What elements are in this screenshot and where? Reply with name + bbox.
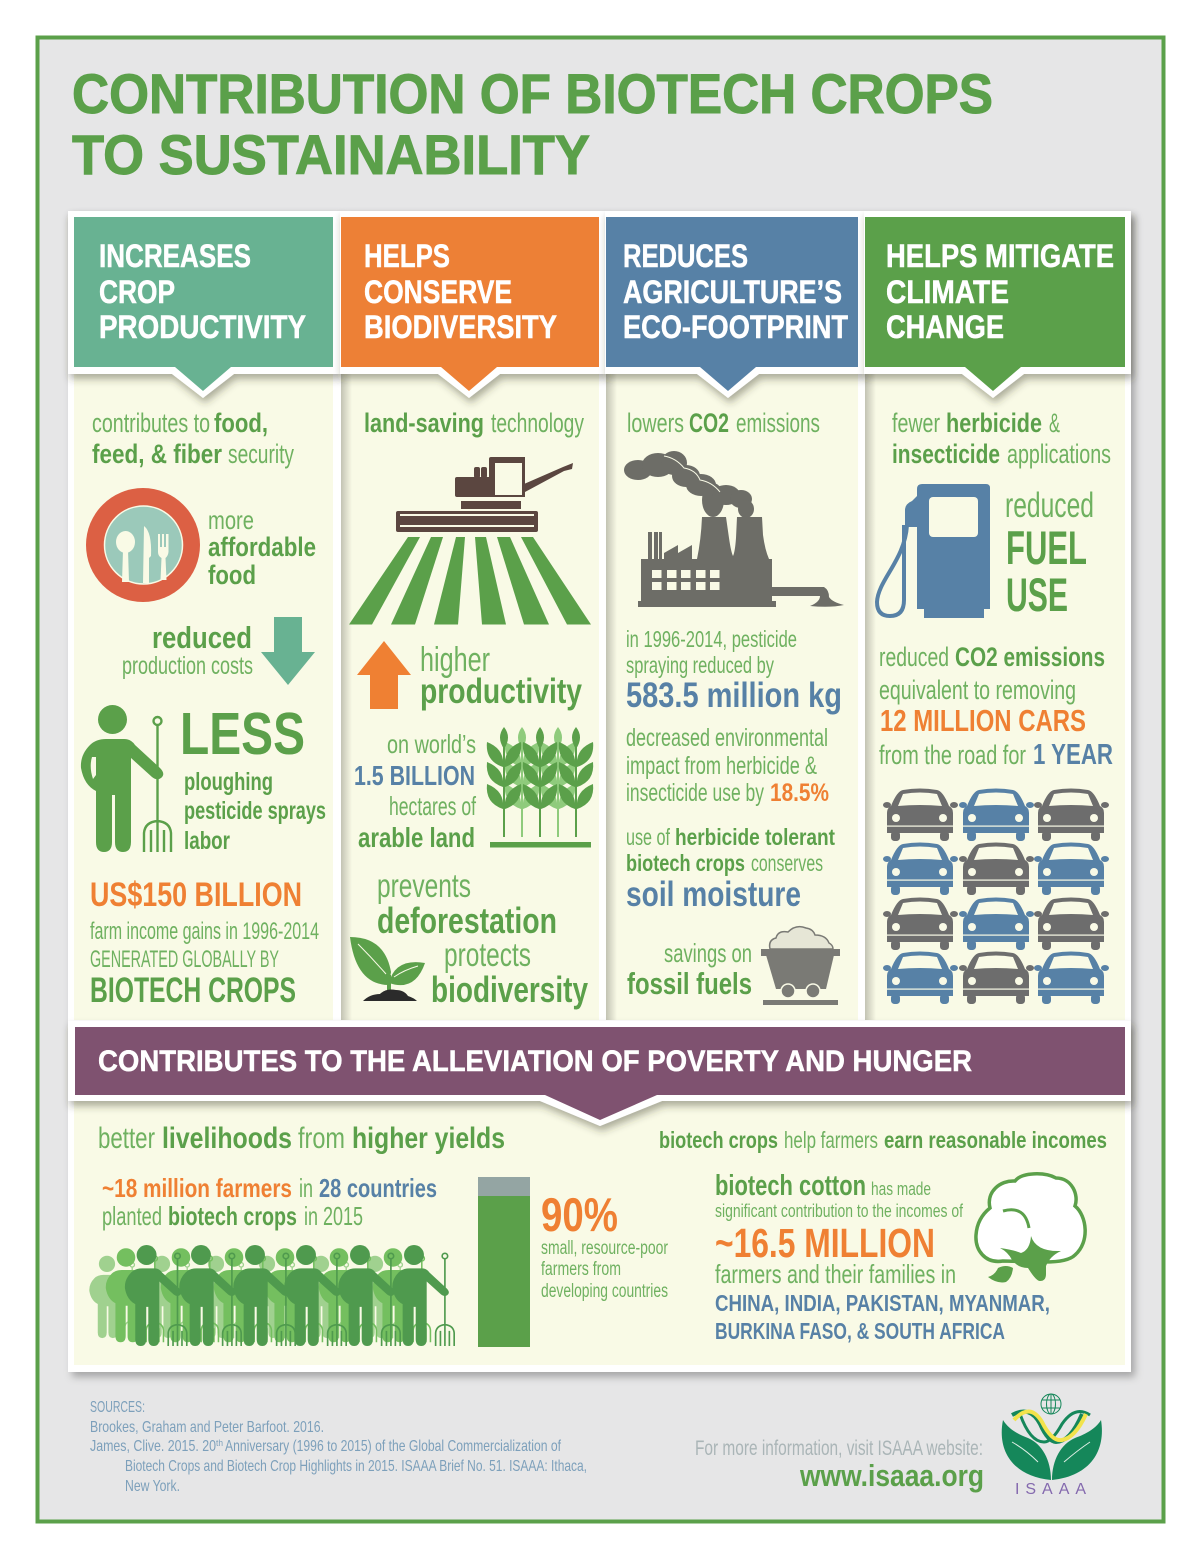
- text: food security: security: [228, 439, 294, 469]
- text: less ploughing: LESS: [180, 701, 305, 767]
- text: 18 million farmers: 28 countries: [319, 1173, 437, 1203]
- text: co2 cars: reduced: [879, 642, 949, 672]
- column 4 content: [877, 408, 1113, 1004]
- text: reduced fuel use: FUEL: [1006, 521, 1087, 574]
- panel: helps mitigate climate change header: HELPS MITIGATE: [886, 238, 1114, 274]
- text: co2 cars: 1 YEAR: [1033, 739, 1113, 771]
- text: food security: contributes to: [92, 408, 210, 438]
- text: co2 cars: [879, 642, 1113, 771]
- text: biotech cotton: [715, 1170, 1050, 1344]
- text: lowers co2 emissions: lowers: [627, 408, 684, 438]
- text: soil moisture: conserves: [751, 850, 823, 876]
- text: less ploughing: pesticide sprays: [184, 797, 326, 825]
- text: biotech cotton: ~16.5 MILLION: [715, 1220, 935, 1266]
- text: more affordable food: affordable: [208, 532, 316, 562]
- text: better livelihoods: from: [298, 1122, 345, 1155]
- icon: cotton boll: [976, 1174, 1085, 1282]
- icon: factory with smoke: [624, 451, 844, 607]
- text: 18 million farmers: in 2015: [304, 1201, 363, 1231]
- text: arable land: hectares of: [389, 791, 477, 821]
- text: lowers co2 emissions: emissions: [736, 408, 820, 438]
- text: pesticide spraying: in 1996-2014, pesticide: [626, 626, 797, 652]
- text: prevents deforestation: prevents: [377, 867, 471, 904]
- panel: helps mitigate climate change header: CLIMATE: [886, 274, 1009, 310]
- text: less ploughing: ploughing: [184, 768, 273, 796]
- text: soil moisture: use of: [626, 824, 670, 850]
- text: higher productivity: productivity: [420, 672, 582, 711]
- text: fewer herbicide: &: [1049, 408, 1060, 438]
- text: fossil fuels: savings on: [664, 938, 752, 968]
- text: prevents deforestation: deforestation: [377, 900, 557, 941]
- text: co2 cars: 12 MILLION CARS: [880, 703, 1086, 738]
- text: sources: Anniversary (1996 to 2015) of the Global Commercialization of: [225, 1438, 561, 1455]
- text: 18 million farmers: biotech crops: [168, 1201, 297, 1231]
- text: sources: Brookes, Graham and Peter Barfoot. 2016.: [90, 1419, 324, 1436]
- text: reasonable incomes: biotech crops: [659, 1127, 778, 1153]
- text: reasonable incomes: earn reasonable incomes: [884, 1127, 1107, 1153]
- text: reduced fuel use: USE: [1006, 568, 1068, 621]
- text: lowers co2 emissions: [627, 408, 820, 438]
- text: arable land: [354, 729, 477, 853]
- icon: isaaa logo: [1002, 1394, 1102, 1498]
- text: fewer herbicide: herbicide: [946, 408, 1042, 438]
- panel: poverty and hunger banner: CONTRIBUTES TO THE ALLEVIATION OF POVERTY AND HUNGER: [98, 1045, 972, 1078]
- text: environmental impact: 18.5%: [770, 779, 829, 807]
- text: sources: [90, 1399, 587, 1495]
- text: 90 percent: 90%: [541, 1188, 618, 1241]
- text: reduced fuel use: [1005, 486, 1094, 621]
- text: 18 million farmers: [102, 1173, 437, 1231]
- text: land-saving technology: land-saving: [364, 408, 484, 438]
- text: more affordable food: [208, 505, 316, 590]
- text: environmental impact: insecticide use by: [626, 779, 764, 807]
- text: 18 million farmers: planted: [102, 1201, 162, 1231]
- icon: down arrow: [261, 617, 315, 685]
- text: fewer herbicide: fewer: [892, 408, 940, 438]
- text: 90 percent: [541, 1188, 668, 1302]
- panel: reduces eco-footprint header: REDUCES: [623, 238, 748, 274]
- text: co2 cars: CO2 emissions: [955, 642, 1105, 672]
- text: arable land: arable land: [358, 822, 475, 853]
- text: sources: New York.: [125, 1478, 180, 1495]
- text: website: [695, 1437, 984, 1493]
- text: sources: Biotech Crops and Biotech Crop Highlights in 2015. ISAAA Brief No. 51. ISAAA: Ithaca,: [125, 1458, 587, 1475]
- icon: grid of cars: [883, 788, 1109, 1004]
- panel: increases crop productivity header: [68, 211, 340, 398]
- text: fewer herbicide: [892, 408, 1111, 469]
- text: better livelihoods: better: [98, 1122, 155, 1155]
- panel: increases crop productivity header: INCREASES: [99, 238, 251, 274]
- text: more affordable food: more: [208, 505, 254, 535]
- icon: field furrows: [349, 537, 591, 624]
- text: higher productivity: higher: [420, 641, 490, 679]
- panel: increases crop productivity header: PRODUCTIVITY: [99, 309, 306, 345]
- icon: plate with cutlery: [86, 488, 200, 602]
- text: biotech cotton: CHINA, INDIA, PAKISTAN, MYANMAR,: [715, 1290, 1050, 1316]
- text: pesticide spraying: 583.5 million kg: [626, 676, 842, 715]
- icon: harvester: [396, 457, 573, 532]
- text: food security: [92, 408, 294, 469]
- text: prevents deforestation: protects: [444, 936, 531, 973]
- panel: helps conserve biodiversity header: [340, 211, 606, 398]
- text: reduced production costs: production costs: [122, 652, 253, 680]
- text: co2 cars: from the road for: [879, 740, 1026, 770]
- text: soil moisture: biotech crops: [626, 850, 745, 876]
- text: 90 percent: farmers from: [541, 1259, 621, 1280]
- text: biotech cotton: biotech cotton: [715, 1170, 866, 1202]
- text: us$150 billion: BIOTECH CROPS: [90, 971, 296, 1010]
- panel: poverty and hunger banner: [68, 1021, 1131, 1126]
- text: 18 million farmers: in: [299, 1173, 313, 1203]
- text: better livelihoods: [98, 1122, 505, 1155]
- text: 18 million farmers: ~18 million farmers: [102, 1173, 292, 1203]
- text: soil moisture: [626, 824, 835, 914]
- text: arable land: on world’s: [387, 729, 476, 759]
- icon: wheat: [487, 727, 593, 848]
- panel: helps conserve biodiversity header: CONSERVE: [364, 274, 512, 310]
- text: soil moisture: soil moisture: [626, 875, 801, 914]
- text: food security: feed, & fiber: [92, 439, 222, 469]
- icon: farmer with fork: [81, 705, 171, 852]
- icon: crowd of farmers: [89, 1245, 454, 1346]
- text: less ploughing: [180, 701, 326, 855]
- text: higher productivity: [420, 641, 582, 711]
- text: environmental impact: impact from herbicide &: [626, 752, 817, 780]
- text: sources: James, Clive. 2015. 20: [90, 1438, 216, 1455]
- text: co2 cars: equivalent to removing: [879, 675, 1076, 705]
- panel: helps mitigate climate change header: CHANGE: [886, 309, 1004, 345]
- text: us$150 billion: GENERATED GLOBALLY BY: [90, 946, 279, 973]
- text: soil moisture: herbicide tolerant: [675, 824, 835, 850]
- text: reasonable incomes: [659, 1127, 1107, 1153]
- panel: helps conserve biodiversity header: BIODIVERSITY: [364, 309, 557, 345]
- text: us$150 billion: US$150 BILLION: [90, 876, 302, 914]
- text: less ploughing: labor: [184, 827, 230, 855]
- panel: reduces eco-footprint header: AGRICULTURE’S: [623, 274, 842, 310]
- panel: reduces eco-footprint header: [605, 211, 865, 398]
- text: food security: food,: [214, 408, 268, 438]
- column 1 content: [81, 408, 326, 1010]
- panel: helps mitigate climate change header: [864, 211, 1131, 398]
- panel: reduces eco-footprint header: ECO-FOOTPRINT: [623, 309, 848, 345]
- text: fewer herbicide: applications: [1007, 439, 1111, 469]
- text: arable land: 1.5 BILLION: [354, 760, 475, 791]
- text: 90 percent: developing countries: [541, 1281, 668, 1302]
- text: fossil fuels: fossil fuels: [627, 966, 752, 1001]
- text: environmental impact: [626, 724, 829, 807]
- text: reduced production costs: [122, 620, 253, 680]
- text: sources: th: [216, 1438, 223, 1448]
- text: prevents deforestation: biodiversity: [431, 969, 588, 1010]
- white frame panel: [68, 211, 1131, 1372]
- icon: sprout: [350, 937, 425, 1001]
- text: prevents deforestation: [377, 867, 588, 1010]
- text: reasonable incomes: help farmers: [784, 1127, 878, 1153]
- text: fossil fuels: [627, 938, 752, 1001]
- text: biotech cotton: significant contribution to the incomes of: [715, 1201, 964, 1221]
- title: [72, 62, 993, 186]
- title: CONTRIBUTION OF BIOTECH CROPS: [72, 62, 993, 125]
- icon: isaaa logo: ISAAA: [1015, 1481, 1086, 1498]
- text: land-saving technology: [364, 408, 584, 438]
- text: biotech cotton: farmers and their families in: [715, 1259, 956, 1289]
- column 3 content: [624, 408, 844, 1005]
- text: us$150 billion: [90, 876, 319, 1010]
- text: better livelihoods: livelihoods: [162, 1122, 292, 1155]
- column 2 content: [349, 408, 593, 1010]
- text: fewer herbicide: insecticide: [892, 439, 1000, 469]
- text: reduced fuel use: reduced: [1005, 486, 1094, 525]
- text: 90 percent: small, resource-poor: [541, 1238, 668, 1259]
- chart: 90 percent stacked bar: [478, 1177, 530, 1347]
- text: pesticide spraying: [626, 626, 842, 715]
- cream column backgrounds: [74, 368, 1125, 1365]
- title: TO SUSTAINABILITY: [72, 123, 590, 186]
- panel: helps conserve biodiversity header: HELPS: [364, 238, 450, 274]
- text: environmental impact: decreased environmental: [626, 724, 828, 752]
- text: better livelihoods: higher yields: [352, 1122, 505, 1155]
- icon: coal cart: [761, 927, 840, 1005]
- text: land-saving technology: technology: [491, 408, 584, 438]
- icon: up arrow: [357, 641, 411, 709]
- icon: fuel pump: [877, 484, 990, 618]
- text: reduced production costs: reduced: [152, 620, 252, 655]
- text: us$150 billion: farm income gains in 1996-2014: [90, 918, 319, 945]
- text: more affordable food: food: [208, 560, 256, 590]
- text: pesticide spraying: spraying reduced by: [626, 652, 774, 678]
- text: lowers co2 emissions: CO2: [689, 408, 729, 438]
- text: sources: SOURCES:: [90, 1399, 145, 1416]
- panel: increases crop productivity header: CROP: [99, 274, 175, 310]
- text: biotech cotton: BURKINA FASO, & SOUTH AFRICA: [715, 1318, 1005, 1344]
- text: biotech cotton: has made: [871, 1179, 931, 1199]
- text: website: www.isaaa.org: [799, 1458, 984, 1493]
- text: website: For more information, visit ISAAA website:: [695, 1437, 983, 1460]
